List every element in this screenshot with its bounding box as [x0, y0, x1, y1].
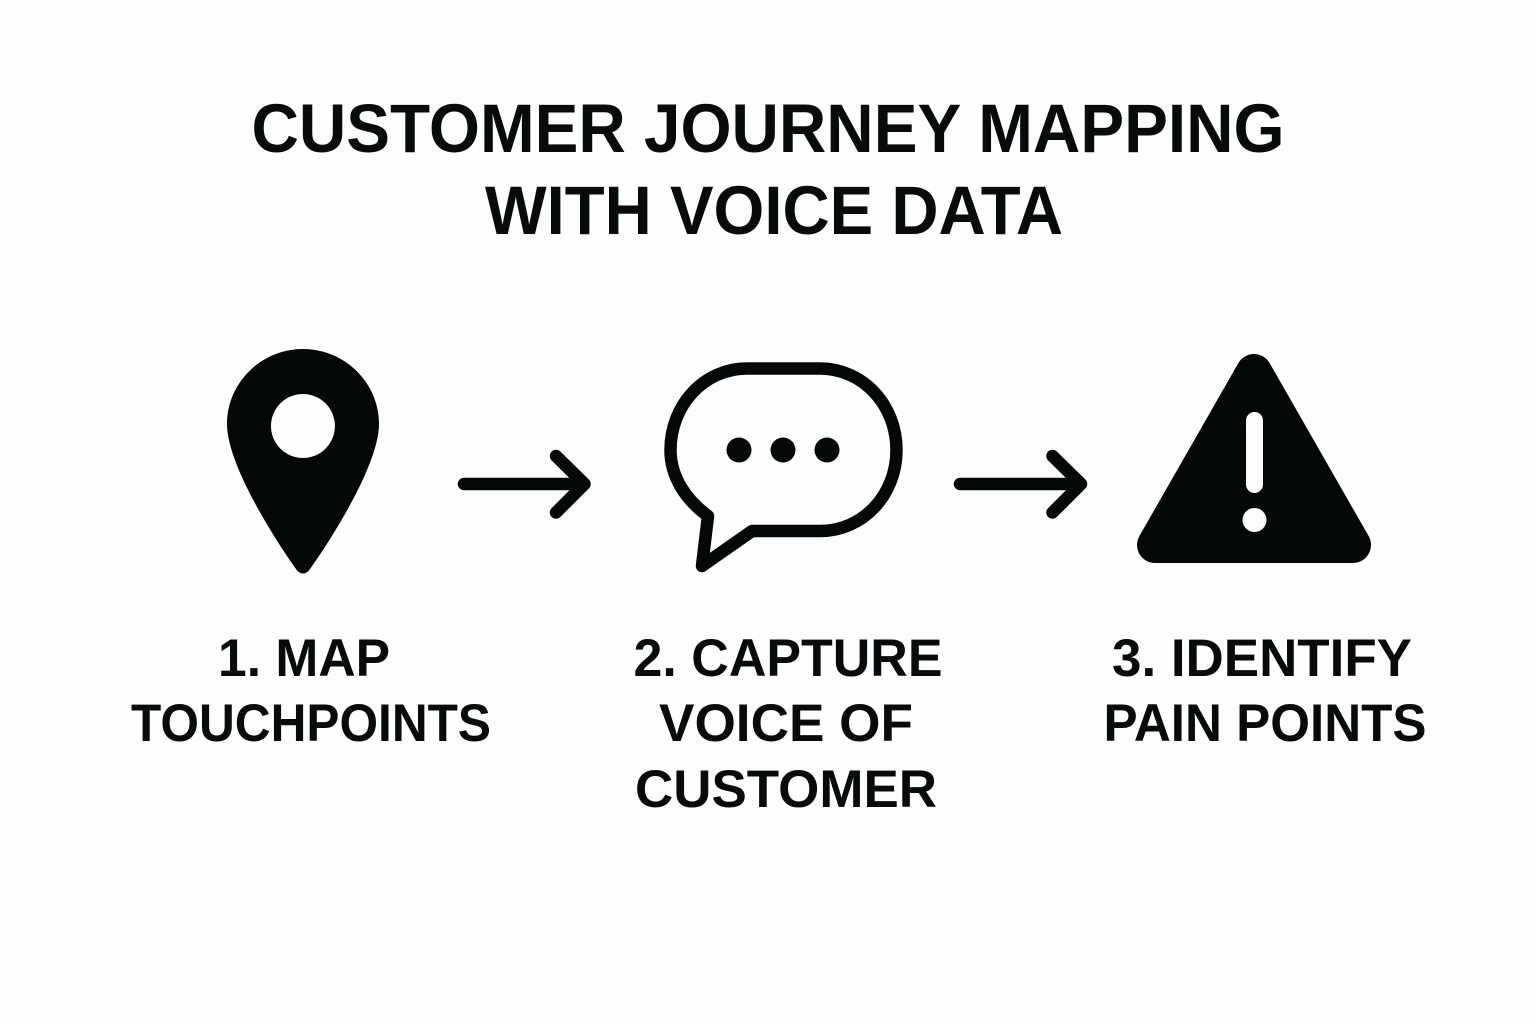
step 1 label	[131, 629, 491, 753]
step 3 label: PAIN POINTS	[1104, 694, 1426, 753]
icon: map pin	[227, 349, 379, 574]
step 2 label: VOICE OF	[659, 694, 913, 753]
step 2 label: CUSTOMER	[635, 760, 937, 819]
arrow: step 2 to step 3	[960, 456, 1081, 512]
icon: speech bubble	[670, 368, 896, 566]
step 1 label: TOUCHPOINTS	[131, 694, 491, 753]
step 1 label: 1. MAP	[218, 629, 390, 688]
icon: warning triangle	[1155, 372, 1353, 545]
step 2 label	[634, 629, 942, 819]
arrow: step 1 to step 2	[464, 456, 584, 512]
step 3 label: 3. IDENTIFY	[1112, 629, 1412, 688]
step 2 label: 2. CAPTURE	[634, 629, 942, 688]
title	[252, 90, 1284, 249]
title: WITH VOICE DATA	[485, 172, 1063, 249]
step 3 label	[1104, 629, 1426, 753]
title: CUSTOMER JOURNEY MAPPING	[252, 90, 1284, 167]
